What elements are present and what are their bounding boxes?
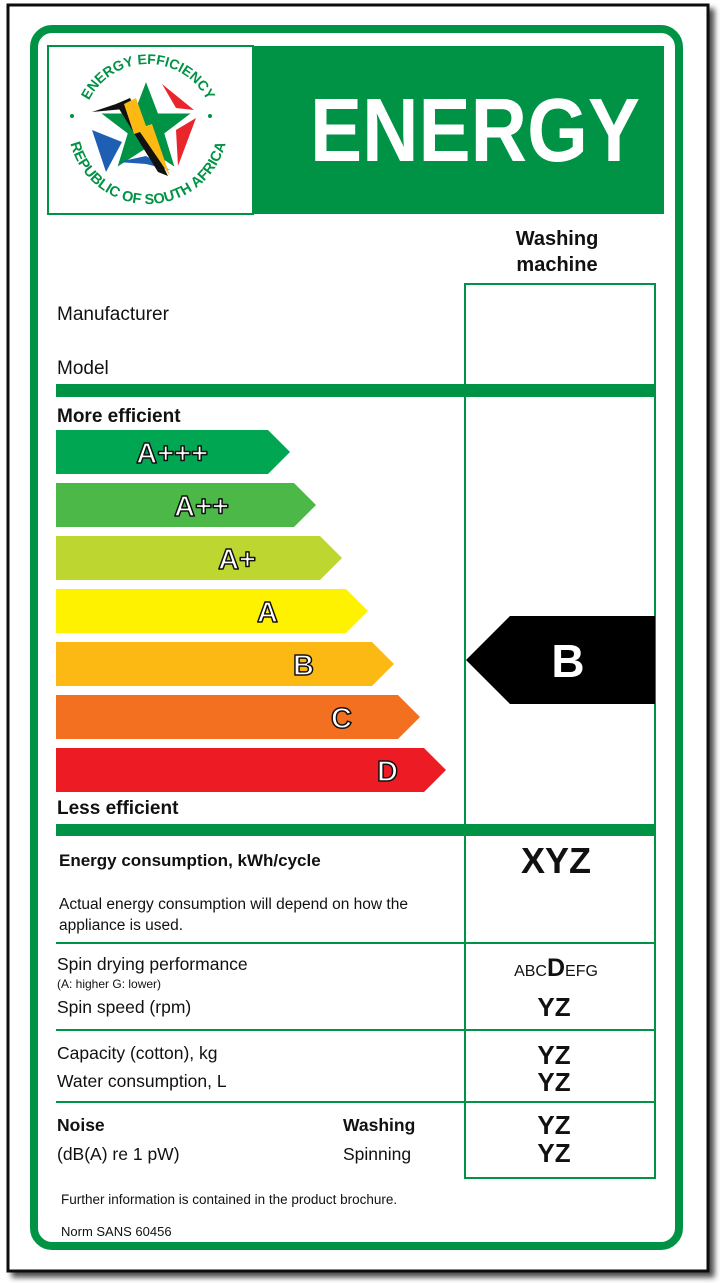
spin: Spin drying performance — [57, 954, 248, 974]
text: More efficient — [57, 406, 181, 427]
right column box — [465, 284, 655, 1178]
logo circle text: REPUBLIC OF SOUTH AFRICA — [70, 141, 226, 204]
text: Spin speed (rpm) — [57, 997, 191, 1017]
text: machine — [516, 254, 598, 276]
rating bars: A+++ — [136, 438, 208, 470]
text: (A: higher G: lower) — [57, 977, 161, 991]
text: YZ — [537, 1067, 571, 1097]
column header: Washing — [516, 228, 598, 250]
capacity: Capacity (cotton), kg — [57, 1043, 217, 1063]
labels: Manufacturer — [57, 304, 170, 325]
text: ABCDEFG — [514, 954, 598, 982]
title bar: ENERGY — [310, 81, 640, 181]
text: appliance is used. — [59, 917, 183, 934]
text: Less efficient — [57, 798, 179, 819]
text: YZ — [537, 1040, 571, 1070]
text: Model — [57, 358, 109, 379]
rating bars — [56, 430, 446, 792]
logo circle text — [70, 54, 226, 204]
footer: Further information is contained in the product brochure. — [61, 1192, 397, 1207]
title bar — [253, 46, 664, 214]
rating bars: A++ — [174, 491, 229, 523]
rating arrow B — [466, 616, 655, 704]
text: Water consumption, L — [57, 1071, 227, 1091]
rating bars: D — [377, 756, 398, 788]
rating bars: C — [331, 703, 352, 735]
rating bars: B — [293, 650, 314, 682]
energy consumption: Energy consumption, kWh/cycle — [59, 851, 321, 870]
rating bars: A+ — [218, 544, 256, 576]
icon: star — [92, 78, 196, 176]
rating bars: A — [257, 597, 278, 629]
text: Actual energy consumption will depend on how the — [59, 896, 408, 913]
text: XYZ — [521, 840, 591, 881]
text: YZ — [537, 992, 571, 1022]
logo panel — [47, 45, 254, 215]
noise: Noise — [57, 1115, 105, 1135]
rating arrow B: B — [551, 635, 585, 687]
text: YZ — [537, 1110, 571, 1140]
text: YZ — [537, 1138, 571, 1168]
logo circle text: ENERGY EFFICIENCY — [81, 54, 216, 100]
text: Spinning — [343, 1144, 411, 1164]
text: Norm SANS 60456 — [61, 1224, 172, 1239]
text: Washing — [343, 1115, 415, 1135]
text: (dB(A) re 1 pW) — [57, 1144, 180, 1164]
